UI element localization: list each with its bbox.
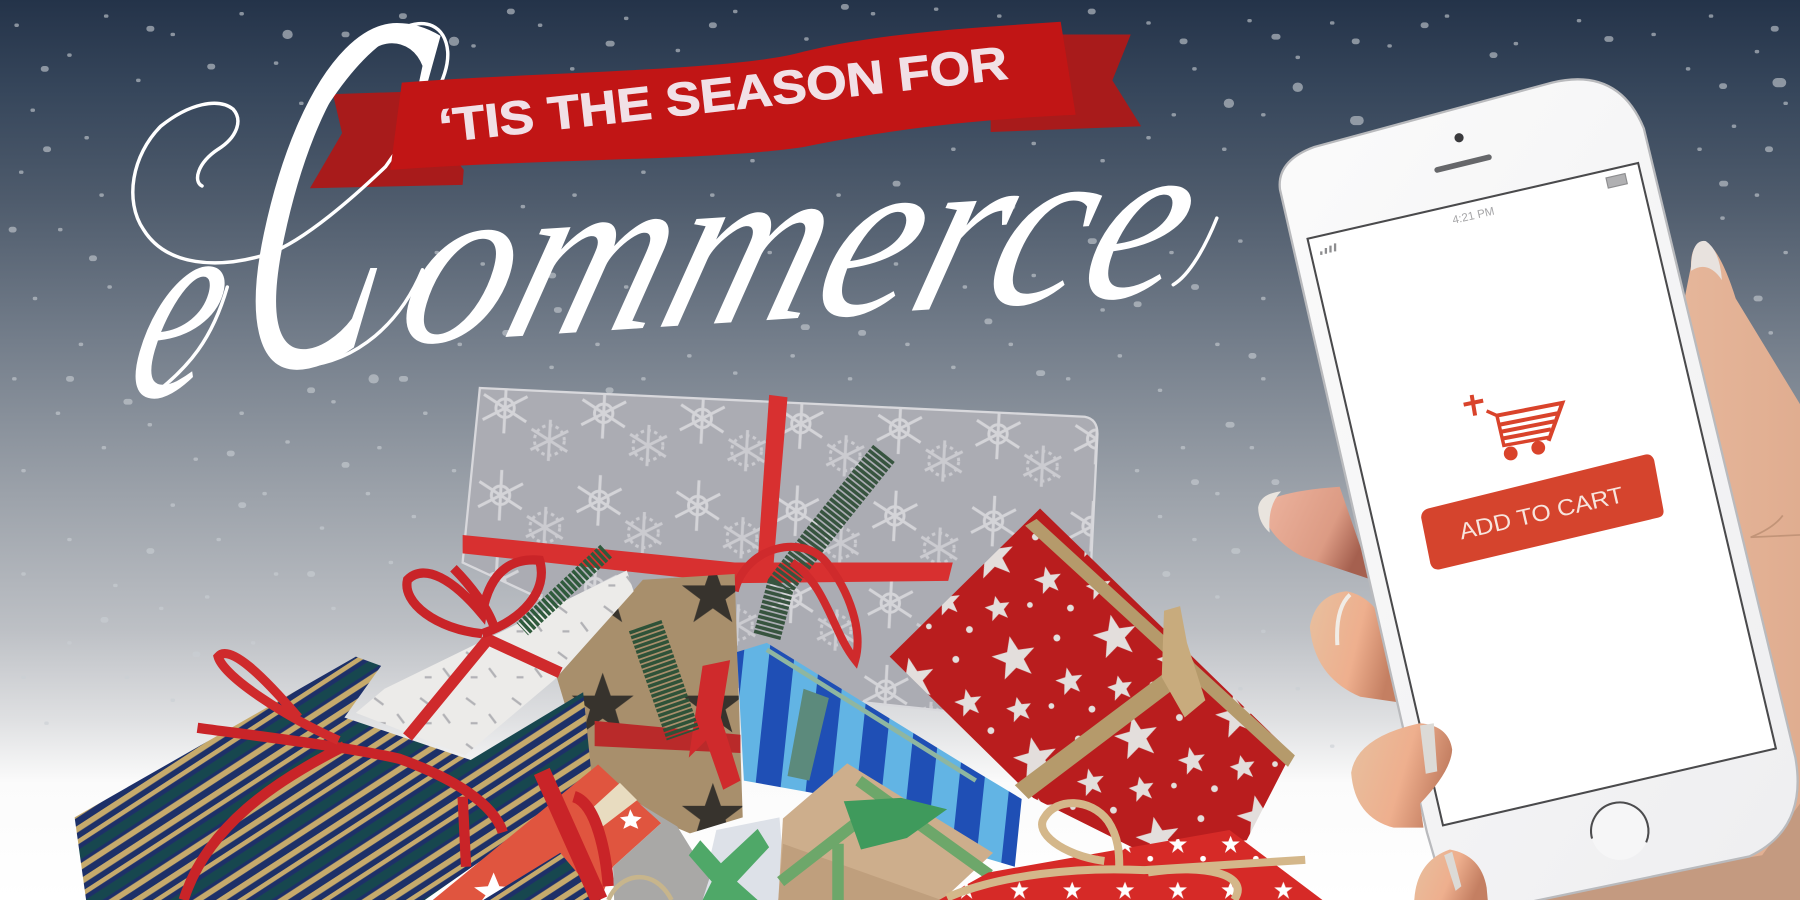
star box ribbon along edge [1025,519,1295,767]
hand: fingernail top [1691,241,1722,280]
title letter: e: e [104,152,267,457]
kraft box pine sprig [645,626,683,735]
icon: add to cart [1464,395,1562,460]
title: eCommerce script wordmark [104,0,1230,478]
ribbon main band [390,22,1076,170]
kraft box ribbon [595,721,740,753]
gift: silver snowflake box [463,388,1097,712]
finger three nail [1420,723,1437,774]
hand: palm crease [1751,515,1800,537]
gift: white paper box [356,551,634,755]
gift: small orange box [433,765,661,900]
finger four nail [1444,852,1461,891]
green ribbon on kraft box [781,781,990,900]
star box crossing ribbon [1015,654,1198,799]
finger one nail [1258,491,1281,533]
blue box top ribbon [767,650,976,781]
smartphone [1280,79,1798,900]
title letters: ommerce: ommerce [375,86,1230,396]
blue box ribbon [788,689,829,781]
gift: red box with twine bow [939,803,1322,900]
orange box striped corner [483,853,600,900]
green bow [844,798,947,849]
silver box horizontal ribbon [463,535,953,583]
foil twine [608,877,672,900]
add to cart label: ADD TO CART [1457,481,1626,544]
ribbon right tail [991,34,1141,132]
white box pine sprig [522,551,606,629]
kraft box bow [689,660,740,790]
add to cart button [1421,454,1664,570]
phone camera [1454,133,1464,142]
gift: kraft star box [557,574,743,833]
battery indicator [1606,174,1627,188]
gift: red star box [890,509,1295,855]
kraft box front face [778,844,941,900]
orange box ribbon [542,771,599,900]
small foil gift and green bow [608,804,769,900]
phone home button [1585,796,1655,866]
orange box stars [474,809,642,900]
floor between gifts [700,817,786,900]
hand: lower palm shadow below phone [1492,804,1800,900]
finger one [1258,487,1372,580]
navy box ribbon down [184,746,466,900]
navy box bow loop [218,654,339,740]
gift: navy striped box [75,654,592,900]
ribbon banner [390,22,1141,170]
gift: blue striped box [737,643,1022,867]
finger four [1414,849,1488,900]
star box twine bow [1162,606,1205,717]
white box red bow [407,560,541,634]
title flourish: C swash loops [133,24,1217,396]
green bow on foil gift [689,829,769,900]
ribbon left tail [310,92,464,188]
twine bow [947,803,1305,900]
finger two nail [1337,595,1350,645]
phone speaker [1437,157,1489,170]
ribbon text: ‘TIS THE SEASON FOR [436,36,1010,152]
silver box pine sprig [767,453,884,637]
silver box bow loops [735,547,858,660]
hand: palm behind phone [1492,243,1800,900]
silver box vertical ribbon [758,395,788,562]
finger three [1351,723,1452,828]
orange box ribbon arc [574,797,608,886]
white box red ribbon [408,639,560,737]
navy box ribbon across [197,728,503,832]
gift: kraft box with green ribbon [778,763,993,900]
signal indicator [1321,243,1335,255]
status bar time: 4:21 PM [1451,206,1496,227]
phone body [1280,79,1798,900]
finger two [1310,591,1401,703]
orange box cream band [593,783,637,827]
phone screen [1308,163,1776,825]
